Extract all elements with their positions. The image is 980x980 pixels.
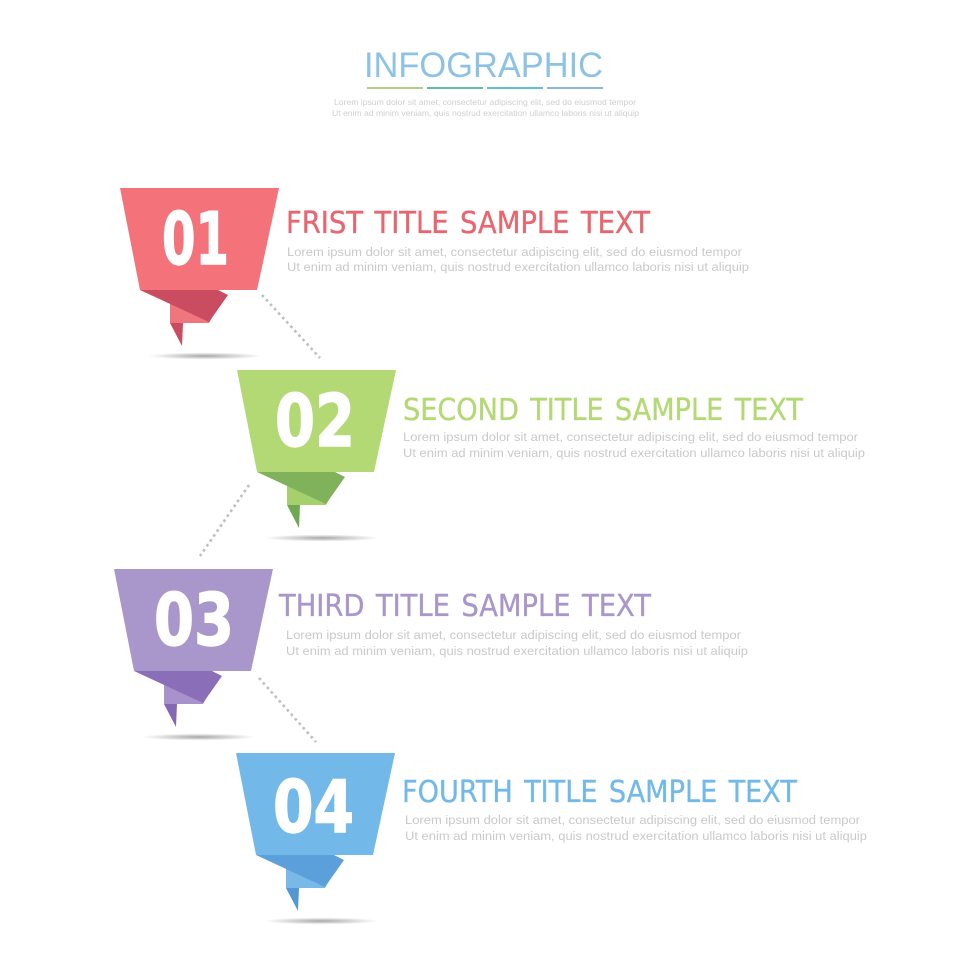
text block [286,628,748,658]
text block: Lorem ipsum dolor sit amet, consectetur adipiscing elit, sed do eiusmod tempor [286,628,741,642]
dotted connector 1 to 2 [262,295,320,358]
heading: FRIST TITLE SAMPLE TEXT [286,206,651,241]
text block: Ut enim ad minim veniam, quis nostrud exercitation ullamco laboris nisi ut aliquip [405,829,867,843]
text block [287,245,749,274]
heading: SECOND TITLE SAMPLE TEXT [403,393,804,428]
text block: Ut enim ad minim veniam, quis nostrud exercitation ullamco laboris nisi ut aliquip [287,260,749,274]
header [332,46,639,118]
panel: step 04 [236,753,867,924]
panel: step 03 [114,569,748,740]
panel: step 02 [237,370,865,542]
subtitle [332,97,639,118]
text block: Ut enim ad minim veniam, quis nostrud exercitation ullamco laboris nisi ut aliquip [286,644,748,658]
title: INFOGRAPHIC [364,46,603,85]
icon: ribbon badge 02 [237,370,396,542]
subtitle: Lorem ipsum dolor sit amet, consectetur adipiscing elit, sed do eiusmod tempor [334,97,636,107]
dotted connector 2 to 3 [200,485,249,556]
title underline segments [367,87,603,89]
dotted connector 3 to 4 [259,678,316,742]
subtitle: Ut enim ad minim veniam, quis nostrud exercitation ullamco laboris nisi ut aliquip [332,108,639,118]
text block: Ut enim ad minim veniam, quis nostrud exercitation ullamco laboris nisi ut aliquip [403,446,865,460]
text block [403,430,865,460]
text block: Lorem ipsum dolor sit amet, consectetur adipiscing elit, sed do eiusmod tempor [287,245,742,259]
heading: THIRD TITLE SAMPLE TEXT [278,589,652,624]
icon: ribbon badge 03: 03 [154,578,234,662]
icon: ribbon badge 04: 04 [273,765,354,849]
panel: step 01 [120,188,749,360]
icon: ribbon badge 03 [114,569,273,740]
text block: Lorem ipsum dolor sit amet, consectetur adipiscing elit, sed do eiusmod tempor [405,813,860,827]
icon: ribbon badge 02: 02 [275,379,355,463]
text block: Lorem ipsum dolor sit amet, consectetur adipiscing elit, sed do eiusmod tempor [403,430,858,444]
heading: FOURTH TITLE SAMPLE TEXT [402,775,798,810]
icon: ribbon badge 01 [120,188,279,360]
text block [405,813,867,843]
icon: ribbon badge 01: 01 [162,197,229,281]
icon: ribbon badge 04 [236,753,395,924]
